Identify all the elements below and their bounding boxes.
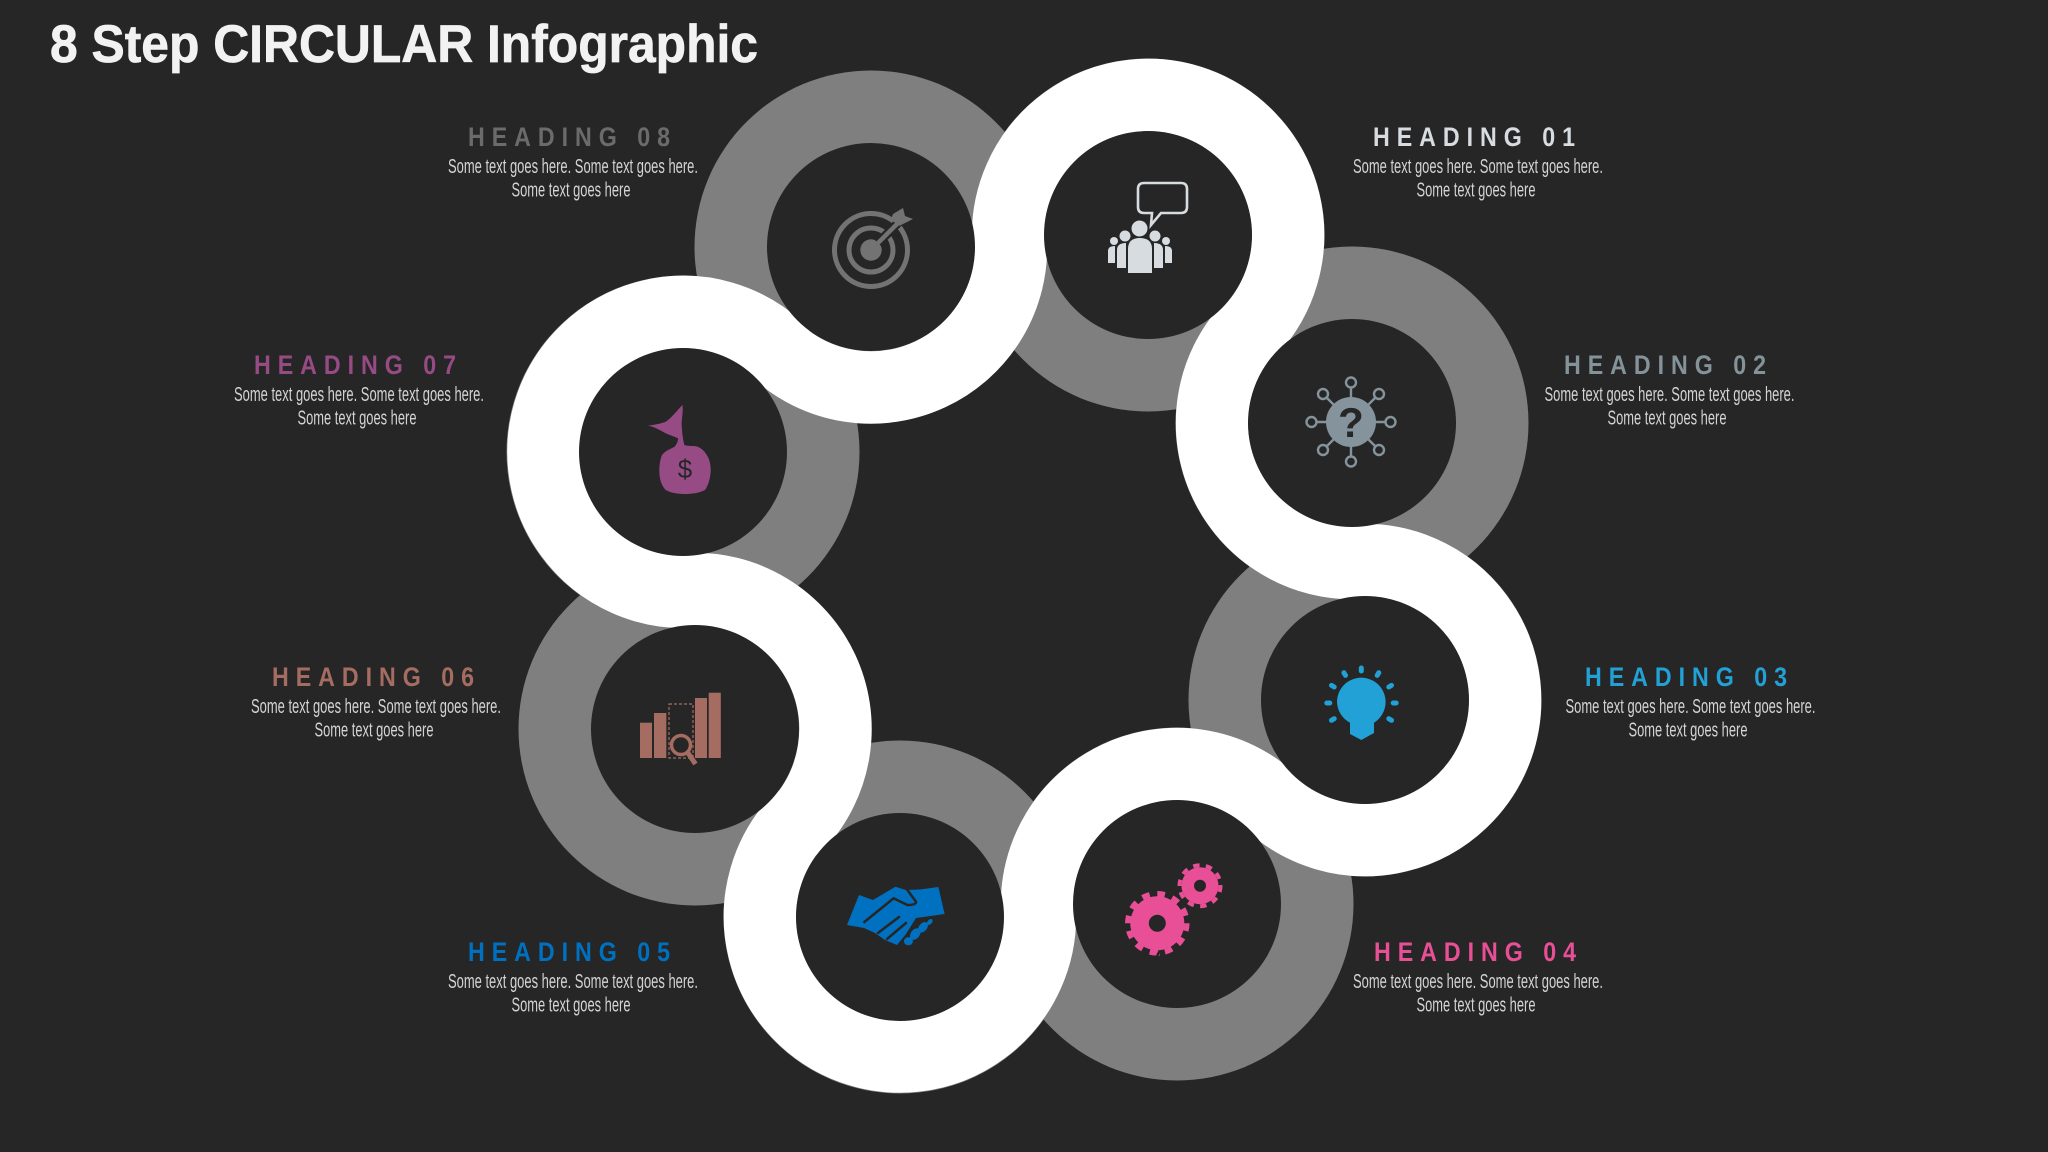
white continuous wavy band — [543, 95, 1505, 1057]
title: 8 Step CIRCULAR Infographic — [50, 15, 758, 74]
text block: heading 04: HEADING 04 — [1374, 937, 1576, 967]
text block: heading 06: Some text goes here. Some text goes here. — [251, 696, 501, 718]
text block: heading 06: HEADING 06 — [272, 662, 474, 692]
grey ring backdrops — [506, 58, 1542, 1094]
text block: heading 08 — [448, 122, 698, 202]
icon: people with speech bubble — [1108, 183, 1187, 273]
text block: heading 06: Some text goes here — [314, 720, 434, 742]
icon: question network — [1306, 378, 1396, 466]
icon: handshake — [847, 887, 945, 945]
text block: heading 06 — [251, 662, 501, 742]
text block: heading 03: HEADING 03 — [1585, 662, 1787, 692]
text block: heading 02: Some text goes here — [1608, 408, 1726, 430]
text block: heading 04 — [1353, 937, 1603, 1016]
icon: money bag: $ — [678, 454, 693, 484]
icon: question network: ? — [1338, 399, 1364, 446]
icon: light bulb — [1327, 668, 1396, 740]
text block: heading 07: Some text goes here. Some text goes here. — [234, 384, 484, 406]
text block: heading 01: Some text goes here. Some text goes here. — [1353, 156, 1603, 178]
text block: heading 05: Some text goes here — [512, 994, 630, 1016]
text block: heading 01: Some text goes here — [1416, 180, 1536, 202]
text block: heading 02 — [1544, 350, 1794, 430]
text block: heading 03 — [1566, 662, 1816, 742]
text block: heading 08: HEADING 08 — [468, 122, 670, 152]
icon: money bag — [648, 405, 711, 494]
text block: heading 03: Some text goes here. Some text goes here. — [1566, 696, 1816, 718]
text block: heading 05 — [448, 937, 698, 1016]
text block: heading 02: HEADING 02 — [1564, 350, 1766, 380]
text block: heading 02: Some text goes here. Some text goes here. — [1544, 384, 1794, 406]
text block: heading 07: HEADING 07 — [254, 350, 456, 380]
dark inner circles — [579, 131, 1469, 1021]
text block: heading 03: Some text goes here — [1628, 720, 1748, 742]
text block: heading 08: Some text goes here. Some text goes here. — [448, 156, 698, 178]
text block: heading 04: Some text goes here. Some text goes here. — [1353, 971, 1603, 993]
text block: heading 01 — [1353, 122, 1603, 202]
text block: heading 07 — [234, 350, 484, 430]
text block: heading 01: HEADING 01 — [1373, 122, 1575, 152]
text block: heading 05: Some text goes here. Some text goes here. — [448, 971, 698, 993]
icon: bar chart with magnifier — [640, 693, 721, 764]
text block: heading 04: Some text goes here — [1416, 994, 1536, 1016]
text block: heading 05: HEADING 05 — [468, 937, 670, 967]
icon: gears — [1128, 865, 1220, 953]
text block: heading 08: Some text goes here — [512, 180, 630, 202]
text block: heading 07: Some text goes here — [298, 408, 416, 430]
icon: target with arrow — [834, 208, 913, 286]
